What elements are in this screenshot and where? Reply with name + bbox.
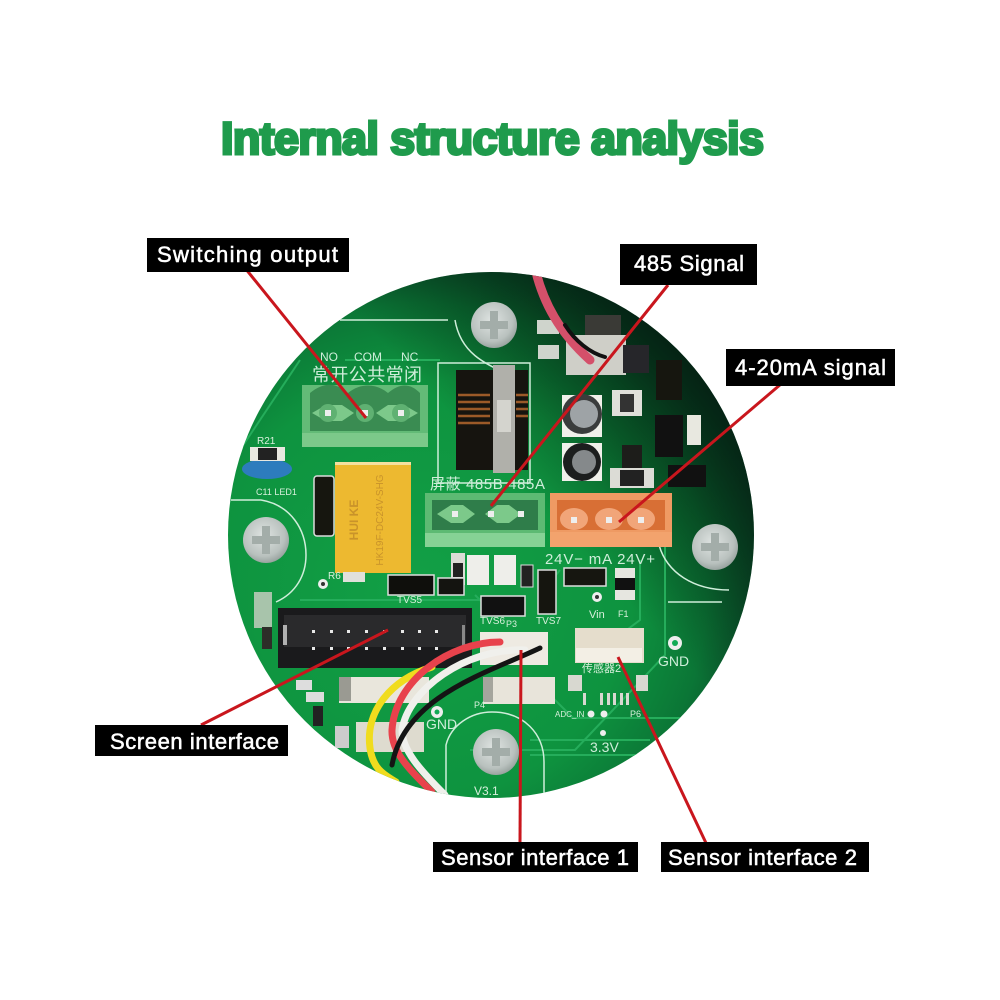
pointer: 485 signal — [491, 285, 668, 506]
pointer: screen interface — [201, 630, 388, 725]
label: sensor interface 2: Sensor interface 2 — [668, 845, 857, 870]
screw: left — [243, 517, 289, 563]
board labels above switching output: COM — [354, 350, 382, 364]
board text labels — [426, 619, 689, 798]
board text labels: P3 — [506, 619, 517, 629]
label: 4-20mA signal — [726, 349, 895, 386]
board text labels: ADC_IN — [555, 710, 585, 719]
label: 485 signal — [620, 244, 757, 285]
circuit board — [225, 268, 760, 803]
screw: bottom — [473, 729, 519, 775]
dark upper-right shade — [372, 272, 754, 666]
small parts by 485 terminal: R6 — [328, 571, 341, 582]
power section components — [537, 315, 706, 488]
pointer: 4-20mA signal — [619, 384, 781, 522]
board resistor R21: R21 — [257, 436, 276, 447]
board text labels: 3.3V — [590, 739, 619, 755]
sensor cable — [369, 642, 540, 795]
board resistor R21 — [250, 436, 297, 497]
pointer: sensor interface 1 — [520, 650, 521, 843]
board labels above switching output: NO — [320, 350, 338, 364]
small parts by 485 terminal — [318, 553, 635, 627]
small parts by 485 terminal: TVS5 — [397, 595, 422, 606]
connector: switching output — [302, 385, 428, 447]
label: 485 pins: 屏蔽 485B 485A — [430, 476, 545, 493]
label: sensor interface 1: Sensor interface 1 — [441, 845, 629, 870]
relay: HK19F-DC24V-SHG — [375, 474, 386, 566]
board copper traces — [240, 360, 708, 755]
small parts left — [254, 592, 349, 748]
board text labels: GND — [658, 653, 689, 669]
board labels above switching output — [314, 352, 420, 383]
small parts by 485 terminal: TVS7 — [536, 616, 561, 627]
screw: top — [471, 302, 517, 348]
label: switching output — [147, 238, 349, 272]
pointer: sensor interface 2 — [618, 657, 706, 843]
board text labels: P4 — [474, 700, 485, 710]
pointer: switching output — [245, 268, 366, 418]
board text labels: P6 — [630, 709, 641, 719]
board labels above switching output: NC — [401, 350, 419, 364]
small parts by 485 terminal: Vin — [589, 609, 605, 621]
board text labels: GND — [426, 716, 457, 732]
board substrate — [225, 268, 760, 803]
label: screen interface: Screen interface — [110, 729, 279, 754]
silk outlines — [231, 320, 729, 798]
power input wire — [535, 268, 605, 360]
capacitor blue — [242, 459, 292, 479]
board resistor R21: C11 LED1 — [256, 487, 297, 497]
connector: 4-20mA — [550, 493, 672, 547]
white connectors — [339, 628, 648, 752]
transformer — [456, 365, 528, 473]
screen interface header — [278, 608, 472, 668]
small parts by 485 terminal: F1 — [618, 609, 629, 619]
relay — [335, 462, 411, 573]
diode D1 — [314, 476, 334, 536]
board text labels: V3.1 — [474, 784, 499, 798]
screw: right — [692, 524, 738, 570]
board labels above switching output: 常开公共常闭 — [312, 365, 422, 385]
relay: HUI KE — [347, 500, 361, 540]
connector: 485 signal — [425, 493, 545, 547]
small parts by 485 terminal: TVS6 — [480, 616, 505, 627]
title: Internal structure analysis — [221, 113, 764, 164]
label: switching output: Switching output — [157, 242, 338, 267]
label: 24V pins: 24V− mA 24V+ — [545, 551, 655, 568]
label: 4-20mA signal: 4-20mA signal — [735, 355, 886, 380]
board text labels: 传感器2 — [582, 662, 621, 675]
label: 485 signal: 485 Signal — [634, 251, 744, 276]
